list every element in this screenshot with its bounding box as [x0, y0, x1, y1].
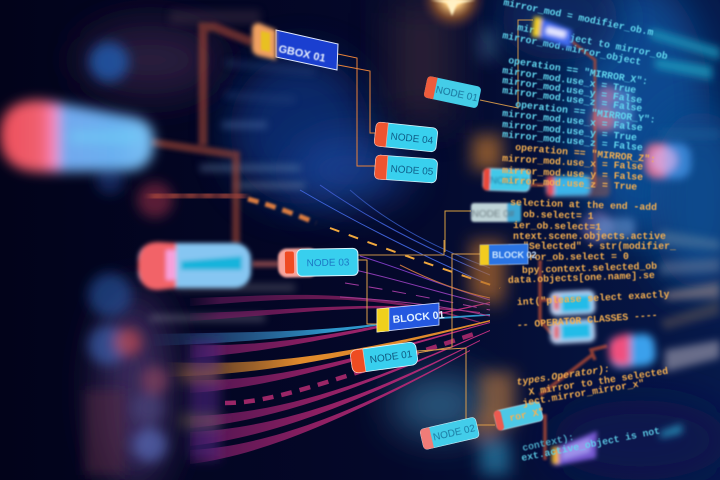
code text: mirror_mod.mirror_object — [501, 30, 642, 68]
cyan line — [150, 314, 490, 346]
code text: ier_ob.select=1 — [513, 220, 601, 233]
code text: mirror_mod.use_x = True — [502, 65, 637, 96]
blurred red connector lines, right — [530, 40, 607, 460]
violet block lower — [552, 431, 597, 466]
block 01: BLOCK 01 — [392, 309, 445, 326]
blurred pills mid right — [549, 290, 596, 344]
gbox 01 block: GBOX 01 — [277, 43, 327, 65]
dashed magenta line — [225, 332, 480, 403]
code text: int("please select exactly — [517, 289, 670, 308]
sharp orange connector lines — [338, 20, 533, 425]
code text: types.Operator): — [516, 364, 611, 388]
code text: ob.select= 1 — [523, 209, 594, 222]
code text: selection at the end -add — [510, 197, 657, 213]
big blurred pill — [0, 100, 154, 172]
medium blurred pill — [138, 242, 251, 290]
code text: data.objects[one.name].se — [508, 270, 655, 286]
dashed orange trajectory — [150, 195, 500, 288]
code text: mirror_object to mirror_ob — [516, 22, 669, 62]
block 02: BLOCK 02 — [492, 250, 537, 260]
blurred small pill on code — [546, 175, 610, 197]
star flare — [419, 0, 487, 32]
code text: operation == "MIRROR_X": — [508, 55, 649, 87]
fan of curved data lines — [150, 185, 490, 464]
code text: ntext.scene.objects.active — [513, 231, 666, 242]
code text: mirror_mod.use_x = False — [502, 108, 643, 134]
code text: mirror_mod.use_y = False — [502, 165, 643, 183]
node 03: NODE 03 — [307, 257, 350, 269]
node 01 lower — [350, 342, 418, 373]
node 02 — [419, 417, 480, 450]
code text: -- OPERATOR CLASSES ---- — [516, 310, 658, 331]
node 01 lower: NODE 01 — [369, 349, 414, 366]
code text: rror_ob.select = 0 — [523, 251, 629, 263]
code text: mirror_mod.use_x = False — [502, 153, 643, 173]
blurred connector lines, left — [150, 27, 280, 264]
code text: ror X" — [508, 406, 545, 424]
block 02 — [480, 244, 537, 265]
right side orange and cyan glows — [470, 30, 515, 475]
node 01 upper — [423, 76, 482, 109]
code text: mirror_mod.use_z = False — [502, 85, 643, 114]
tilted node on lower code — [493, 401, 544, 431]
blurred node right upper: NODE X — [490, 175, 529, 188]
node 05 — [374, 155, 438, 183]
node 04: NODE 04 — [390, 131, 434, 147]
big pill lower right — [608, 333, 657, 369]
gbox 01 block — [252, 23, 338, 70]
code text: ject.mirror_mirror_x" — [522, 378, 645, 409]
pill on operator line — [549, 319, 596, 344]
pill on print line — [549, 290, 596, 316]
code text — [501, 0, 676, 464]
code text: mirror_mod.use_y = True — [502, 119, 637, 143]
code text: context): — [521, 432, 575, 454]
blurred background code blocks — [150, 10, 315, 321]
pale node over code: NODE 0# — [472, 209, 515, 220]
code text: ext.active_object is not — [520, 426, 661, 464]
code text: mirror_mod.use_z = False — [502, 129, 643, 154]
node 05: NODE 05 — [390, 164, 434, 178]
node 04 — [374, 122, 438, 152]
code text: operation == "MIRROR_Y": — [515, 99, 656, 126]
node 01 upper: NODE 01 — [435, 85, 479, 104]
code text: bpy.context.selected_ob — [522, 261, 657, 276]
blurred node right upper — [483, 168, 530, 192]
node 03 — [278, 247, 358, 278]
top small yellow and blue block — [532, 17, 572, 48]
node 02: NODE 02 — [432, 423, 477, 444]
code text: "Selected" + str(modifier_ — [523, 241, 676, 252]
blurred pink bokeh over code — [581, 85, 691, 243]
code text: mirror_mod.use_y = False — [502, 75, 643, 106]
pale node over code — [471, 203, 521, 222]
blurred left bokeh dots — [85, 42, 220, 475]
code text: X mirror to the selected — [528, 366, 669, 398]
code text: mirror_mod.use_z = True — [502, 175, 638, 193]
code text: operation == "MIRROR_Z": — [515, 142, 656, 165]
block 01 — [377, 303, 445, 332]
orange line — [165, 320, 490, 377]
blurred streaks, right — [650, 28, 720, 438]
